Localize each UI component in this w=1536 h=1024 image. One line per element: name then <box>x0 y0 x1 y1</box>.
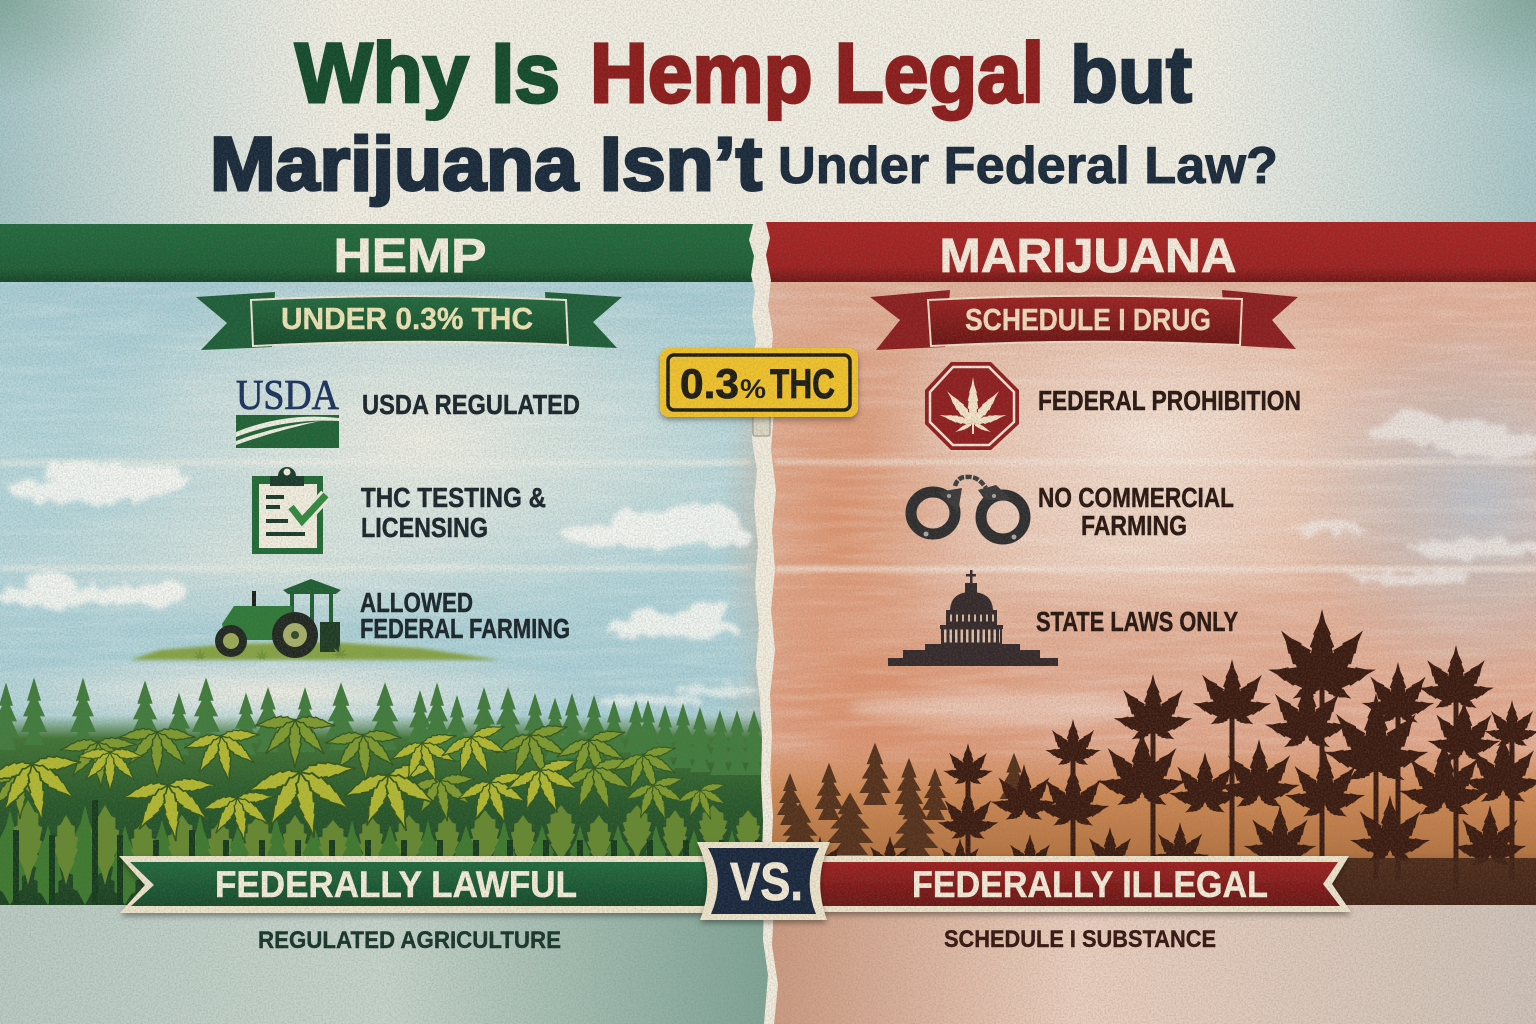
item: USDA regulated <box>236 373 580 448</box>
ribbon tails <box>870 290 1298 350</box>
ribbon tails <box>196 292 622 350</box>
silhouette leaves <box>793 609 1536 882</box>
subheading ribbon: under 0.3% THC <box>196 292 622 350</box>
item: no commercial farming: NO COMMERCIAL <box>1038 482 1234 513</box>
icon: USDA logo <box>236 373 340 448</box>
subheading ribbon: under 0.3% THC: UNDER 0.3% THC <box>281 301 533 336</box>
silhouette stems <box>968 683 1512 890</box>
torn paper divider <box>749 222 778 1024</box>
ribbon body <box>928 296 1242 346</box>
lower upright blades <box>0 805 746 905</box>
threshold sign: 0.3% THC: % <box>740 374 766 404</box>
sky streak texture <box>0 282 1536 762</box>
panel: hemp sky background <box>0 226 768 1024</box>
VS badge <box>697 842 830 920</box>
item: THC testing and licensing: THC TESTING & <box>361 482 546 513</box>
title: Marijuana Isn’t <box>210 122 762 207</box>
clouds: hemp side <box>0 460 760 706</box>
icon: stop sign with leaf <box>925 362 1019 450</box>
hanging olive foliage <box>14 800 760 885</box>
caption: schedule I substance: SCHEDULE I SUBSTANCE <box>944 926 1216 953</box>
item: allowed federal farming: ALLOWED <box>360 587 473 618</box>
subheading ribbon: schedule I drug: SCHEDULE I DRUG <box>965 302 1211 337</box>
item: allowed federal farming <box>130 579 570 660</box>
item: USDA regulated: USDA REGULATED <box>362 389 580 420</box>
icon: clipboard <box>252 467 326 554</box>
ribbon: federally lawful <box>119 856 720 913</box>
marijuana banner: MARIJUANA <box>940 230 1236 283</box>
item: federal prohibition: FEDERAL PROHIBITION <box>1038 385 1301 416</box>
ground: hemp side <box>0 905 768 1024</box>
marijuana banner <box>766 222 1536 283</box>
dark stalk lines <box>16 800 758 905</box>
subheading ribbon: schedule I drug <box>870 290 1298 350</box>
hemp field <box>0 677 767 910</box>
page header background <box>0 0 1536 226</box>
ribbon: federally lawful: FEDERALLY LAWFUL <box>215 864 577 905</box>
icon: capitol building <box>888 570 1058 666</box>
title: but <box>1070 30 1192 119</box>
item: no commercial farming <box>911 477 1234 541</box>
item: allowed federal farming: FEDERAL FARMING <box>360 613 570 644</box>
title: Under Federal Law? <box>778 137 1278 195</box>
tree line <box>0 677 767 775</box>
ribbon: federally illegal <box>800 856 1351 912</box>
item: state laws only <box>888 570 1238 666</box>
icon: handcuffs <box>911 477 1025 540</box>
hemp banner: HEMP <box>334 230 486 283</box>
bright front leaves <box>0 717 594 850</box>
item: state laws only: STATE LAWS ONLY <box>1036 606 1238 637</box>
clouds: marijuana side <box>1290 412 1536 585</box>
small rear silhouettes <box>777 743 1028 860</box>
panel: marijuana sky background <box>720 226 1536 1024</box>
threshold sign: 0.3% THC: 0.3 <box>680 360 739 407</box>
marijuana field <box>772 609 1536 910</box>
item: THC testing and licensing: LICENSING <box>361 512 488 543</box>
icon: USDA logo: USDA <box>236 373 340 419</box>
hemp banner <box>0 224 754 283</box>
back leaves <box>0 714 736 831</box>
item: federal prohibition <box>925 362 1301 450</box>
ground: marijuana side <box>768 905 1536 1024</box>
threshold sign: 0.3% THC: THC <box>770 360 835 407</box>
icon: tractor <box>130 579 500 660</box>
threshold sign: 0.3% THC <box>660 348 858 436</box>
VS badge: VS. <box>730 852 803 912</box>
title: Hemp Legal <box>590 26 1044 120</box>
item: no commercial farming: FARMING <box>1081 510 1187 541</box>
sign plate <box>660 348 858 417</box>
sign bracket <box>753 412 770 436</box>
title: Why Is <box>295 26 560 120</box>
dark ground band <box>772 858 1536 908</box>
ribbon body <box>251 296 568 346</box>
title <box>210 26 1278 207</box>
caption: regulated agriculture: REGULATED AGRICULTURE <box>258 927 561 954</box>
item: THC testing and licensing <box>252 467 546 554</box>
ribbon: federally illegal: FEDERALLY ILLEGAL <box>912 864 1268 905</box>
